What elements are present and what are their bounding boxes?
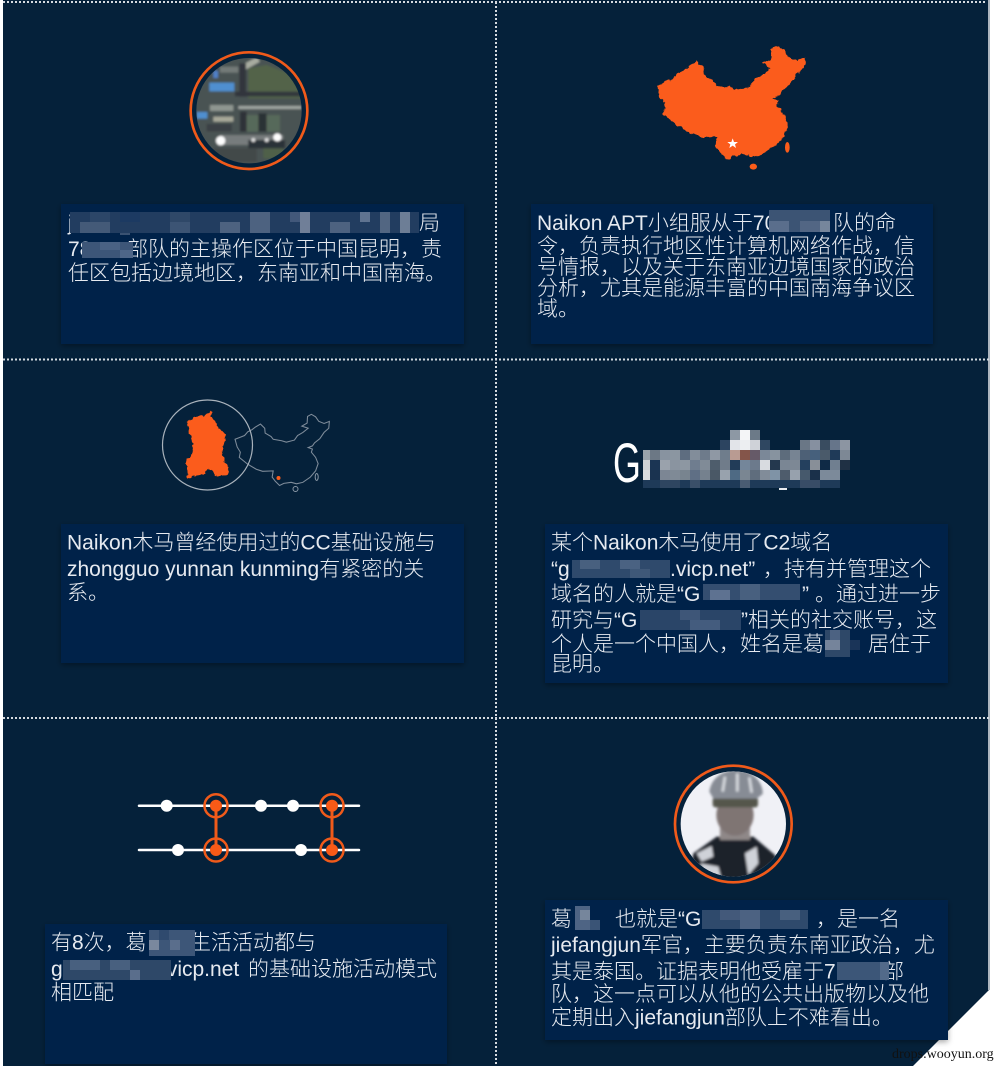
text box: Yunnan locator (61, 524, 464, 663)
text box: domain owner: .vicp.net” (670, 558, 755, 581)
text box: activity correlation: 相匹配 (51, 982, 114, 1004)
text box: activity correlation: 的基础设施活动模式 (248, 958, 437, 981)
text box: activity correlation: .vicp.net (161, 958, 239, 981)
text box: person profile: 其是泰国。证据表明他受雇于7 (551, 961, 836, 984)
text box: domain owner: ”相关的社交账号，这 (741, 609, 937, 632)
redaction mosaic (82, 242, 133, 258)
text box: person profile: 也就是“G (615, 908, 701, 931)
text box: Yunnan locator: zhongguo yunnan kunming有紧密的关 (67, 558, 424, 581)
text box: person profile: 队，这一点可以从他的公共出版物以及他 (551, 983, 929, 1006)
panel: activity correlation (45, 794, 447, 1064)
text box: domain owner: 昆明。 (551, 653, 614, 676)
text box: domain owner (545, 524, 948, 683)
redaction mosaics (575, 906, 889, 980)
text box: operating area (61, 204, 464, 344)
text box: activity correlation: 生活活动都与 (190, 932, 316, 954)
text box: operating area: 78 (68, 238, 91, 261)
panel: person profile (545, 766, 997, 1066)
text box: unit mission: Naikon APT小组服从于70 (537, 212, 776, 235)
text box: domain owner: 某个Naikon木马使用了C2域名 (551, 532, 832, 554)
text box: unit mission: 域。 (537, 298, 579, 321)
redaction mosaics (63, 930, 195, 980)
text box: domain owner: ，持有并管理这个 (763, 558, 931, 581)
icon: pixelated name logo (613, 430, 850, 494)
text box: unit mission: 号情报，以及关于东南亚边境国家的政治 (537, 256, 915, 279)
icon: China map with star (657, 45, 805, 170)
panel: operating area (61, 52, 464, 344)
panel: Yunnan locator (61, 400, 464, 663)
text box: unit mission (531, 204, 933, 344)
chart: two timelines with matching events (139, 794, 359, 862)
text box: Yunnan locator: Naikon木马曾经使用过的CC基础设施与 (67, 532, 436, 554)
text box: domain owner: 域名的人就是“G (551, 583, 700, 606)
text box: operating area: j (67, 212, 73, 235)
redaction mosaic (70, 212, 419, 235)
text box: person profile: 部 (883, 961, 904, 984)
text box: person profile: ，是一名 (816, 908, 900, 931)
redaction mosaic (769, 210, 830, 232)
text box: operating area: 部队的主操作区位于中国昆明，责 (127, 238, 442, 261)
icon: satellite image in orange ring (191, 52, 307, 169)
text box: domain owner: 。通过进一步 (815, 583, 941, 606)
text box: domain owner: “g (551, 558, 570, 581)
text box: domain owner: 居住于 (868, 633, 931, 656)
text box: activity correlation: 有8次，葛 (51, 932, 147, 954)
text box: operating area: 任区包括边境地区，东南亚和中国南海。 (68, 262, 446, 285)
redaction mosaics (572, 560, 860, 657)
text box: activity correlation (45, 924, 447, 1064)
text box: domain owner: 研究与“G (551, 609, 637, 632)
icon: pixelated name logo: G (613, 431, 641, 494)
text box: activity correlation: g (51, 958, 63, 981)
text box: person profile: 定期出入jiefangjun部队上不难看出。 (551, 1007, 893, 1030)
icon: Kunming region with China outline (162, 400, 329, 492)
icon: portrait in orange ring (675, 766, 792, 882)
panel: unit mission (531, 45, 933, 344)
text box: person profile (545, 900, 948, 1040)
text box: unit mission: 令，负责执行地区性计算机网络作战，信 (537, 235, 915, 258)
panel: domain owner (545, 430, 948, 683)
text box: unit mission: 队的命 (833, 212, 896, 235)
text box: domain owner: 个人是一个中国人，姓名是葛 (551, 633, 824, 656)
text box: Yunnan locator: 系。 (67, 582, 109, 604)
text box: person profile: 葛 (551, 908, 572, 931)
text box: person profile: jiefangjun军官，主要负责东南亚政治，尤 (550, 934, 935, 957)
text box: domain owner: ” (802, 583, 809, 606)
page fold corner (913, 990, 989, 1066)
text box: unit mission: 分析，尤其是能源丰富的中国南海争议区 (537, 277, 915, 300)
text box: operating area: 局 (419, 212, 440, 235)
watermark: drops.wooyun.org (892, 1047, 994, 1062)
